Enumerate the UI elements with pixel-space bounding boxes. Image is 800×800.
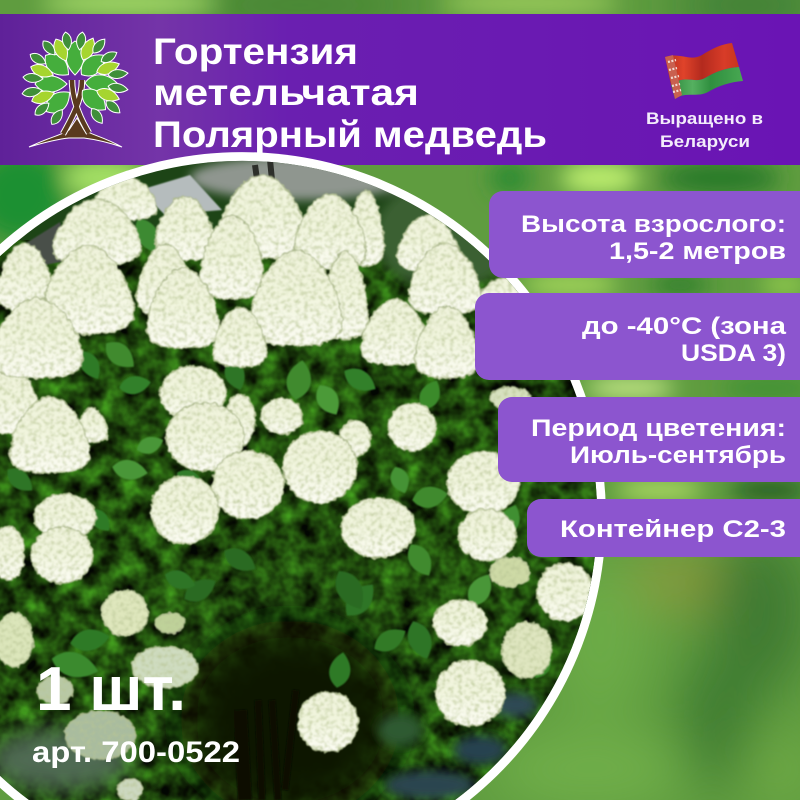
leaves: large: [35, 41, 117, 118]
grown in Belarus caption: Беларуси: [660, 133, 750, 151]
lower-left grey ground cover: [0, 730, 130, 790]
panel: height: 1,5-2 метров: [609, 238, 786, 265]
panel: frost hardiness: [475, 293, 800, 380]
panel: container: Контейнер С2-3: [560, 516, 786, 543]
dark shrub centre: [180, 620, 400, 800]
panel: height: [489, 191, 800, 278]
panel: frost hardiness: до -40°С (зона: [582, 313, 787, 340]
panel: flowering period: Период цветения:: [531, 415, 786, 442]
panel: container: [527, 499, 800, 557]
article number: арт. 700-0522: [32, 736, 240, 769]
sky and trees: [184, 160, 496, 286]
icon: Belarus flag: [665, 43, 743, 99]
panel: height: Высота взрослого:: [521, 211, 786, 238]
panel: flowering period: Июль-сентябрь: [570, 442, 786, 469]
hydrangea flower heads: [0, 175, 593, 800]
banner: [0, 14, 800, 165]
panel: frost hardiness: USDA 3): [681, 340, 786, 367]
trunks: [240, 690, 296, 800]
title: [153, 31, 547, 155]
title: Полярный медведь: [153, 114, 547, 155]
leaves: [2, 213, 575, 690]
leaves: dark outer: [21, 31, 129, 127]
photo: hydrangea shrub in circle frame: [0, 150, 610, 800]
leaves: lime: [29, 36, 121, 106]
logo: tree: [21, 31, 129, 147]
panel: flowering period: [498, 397, 800, 482]
quantity: 1 шт.: [36, 655, 186, 724]
title: метельчатая: [153, 72, 419, 113]
grown in Belarus caption: Выращено в: [646, 110, 763, 128]
grown in Belarus caption: [646, 110, 763, 151]
blue conifer and ground flowers: [378, 693, 537, 799]
tree trunk and roots: [29, 80, 122, 147]
title: Гортензия: [153, 31, 358, 72]
